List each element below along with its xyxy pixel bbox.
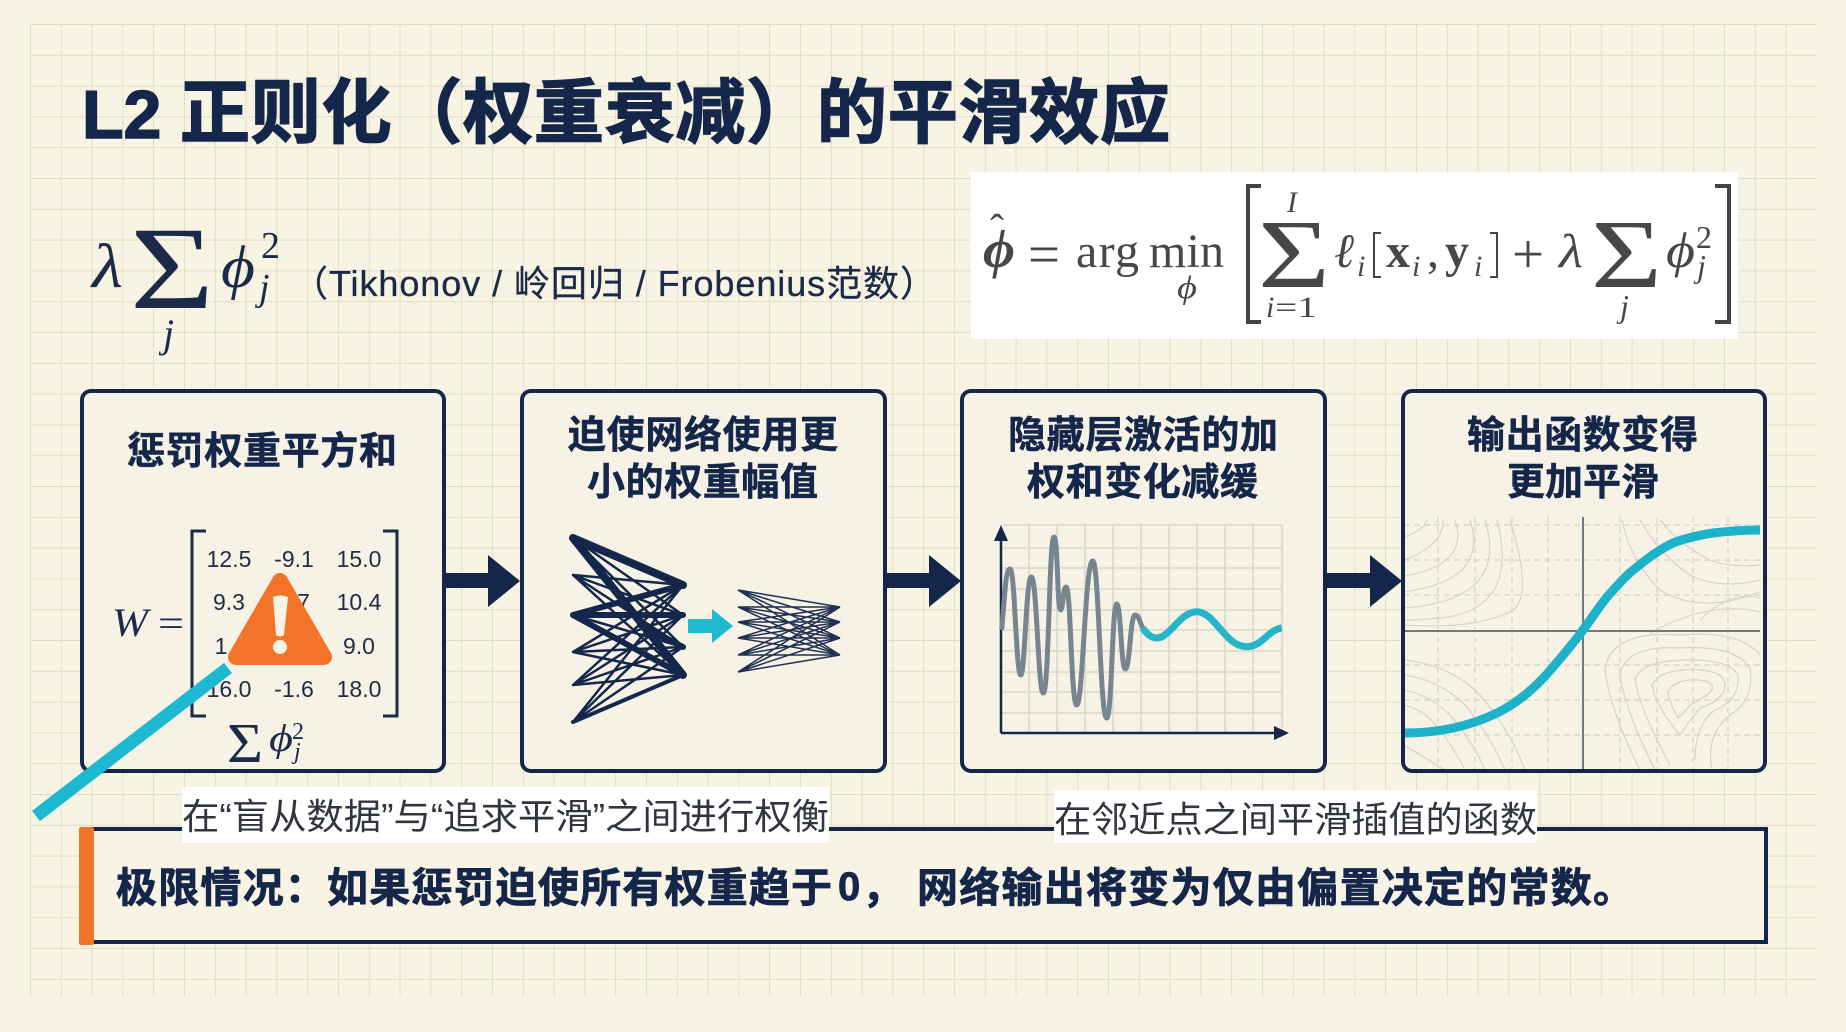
objective formula: Σ	[1258, 201, 1330, 309]
objective formula: ,	[1427, 225, 1439, 278]
weight matrix: 9.3	[213, 589, 245, 615]
callout text: 0	[838, 865, 860, 909]
weight matrix: 18.0	[337, 676, 381, 702]
panel 2 heading: 迫使网络使用更	[568, 415, 838, 457]
objective formula: i	[1412, 250, 1420, 283]
panel 4: smoother output	[1403, 391, 1765, 771]
objective formula: ϕ	[1666, 222, 1695, 278]
objective formula: x	[1386, 225, 1410, 278]
objective formula: j	[1616, 288, 1629, 324]
panel 3 heading: 权和变化减缓	[1027, 462, 1258, 504]
sum of squares formula: j	[291, 739, 301, 765]
weight matrix: =	[158, 603, 184, 645]
panel 3 heading: 隐藏层激活的加	[1008, 415, 1278, 457]
objective formula: 2	[1696, 219, 1712, 255]
formula: penalty term: λ	[90, 233, 123, 301]
connector: cyan line	[36, 668, 228, 816]
formula: penalty term	[90, 203, 280, 356]
arrow 1	[445, 555, 520, 607]
weight matrix: -1.6	[274, 676, 314, 702]
small-weight network	[738, 590, 840, 672]
smooth activation curve	[1143, 612, 1282, 647]
panel 2 heading	[568, 415, 838, 504]
callout text	[116, 865, 1634, 911]
weight matrix: 15.0	[337, 546, 381, 572]
objective formula: λ	[1557, 225, 1583, 278]
objective formula: i	[1357, 250, 1365, 283]
noisy activation curve	[1002, 537, 1143, 718]
icon: warning triangle	[236, 581, 324, 657]
callout accent bar	[79, 827, 94, 945]
panel 4 heading: 输出函数变得	[1467, 415, 1698, 457]
objective formula: ϕ	[1177, 269, 1197, 305]
callout: extreme case	[79, 827, 1766, 945]
weight matrix: 2.7	[278, 589, 310, 615]
label: trade-off: 在“盲从数据”与“追求平滑”之间进行权衡	[182, 796, 829, 837]
weight matrix: 1	[215, 633, 227, 659]
objective formula: ϕ	[983, 219, 1015, 279]
callout text: 网络输出将变为仅由偏置决定的常数。	[917, 865, 1634, 911]
objective formula: ˆ	[990, 207, 1004, 253]
title: L2	[82, 77, 161, 153]
large-weight network	[573, 538, 683, 722]
sum of squares formula: ϕ	[269, 718, 293, 760]
formula: penalty term: j	[254, 267, 270, 309]
weight matrix: 9.0	[343, 633, 375, 659]
weight matrix: 16.0	[207, 676, 251, 702]
formula: penalty term: 2	[261, 225, 280, 267]
objective formula: y	[1445, 225, 1469, 278]
objective formula: I	[1286, 186, 1299, 219]
formula: penalty term: j	[158, 311, 174, 356]
objective formula: =	[1028, 224, 1060, 286]
weight matrix	[112, 531, 397, 716]
objective formula: Σ	[1591, 201, 1662, 309]
objective formula: +	[1512, 224, 1544, 286]
title: 正则化（权重衰减）的平滑效应	[180, 74, 1170, 152]
activation chart	[994, 525, 1289, 740]
panel 4 heading	[1467, 415, 1698, 504]
objective formula: arg	[1076, 225, 1139, 278]
objective formula	[983, 186, 1729, 324]
weight matrix: W	[112, 600, 152, 645]
sum of squares formula	[227, 713, 304, 775]
objective formula: i	[1474, 250, 1482, 283]
objective formula: i	[1266, 291, 1274, 324]
objective formula: ℓ	[1334, 225, 1354, 278]
weight matrix: 10.4	[337, 589, 382, 615]
formula: penalty term: ϕ	[221, 234, 255, 300]
arrow 2	[885, 555, 961, 607]
panel 3 heading	[1008, 415, 1278, 504]
arrow 3	[1325, 555, 1402, 607]
callout text: 极限情况：如果惩罚迫使所有权重趋于	[116, 865, 832, 911]
panel 4 heading: 更加平滑	[1507, 462, 1659, 504]
chart axes	[994, 525, 1289, 740]
weight matrix: 3.3	[278, 633, 310, 659]
panel 1 heading: 惩罚权重平方和	[127, 431, 397, 473]
formula: penalty term: Σ	[130, 203, 214, 334]
objective formula: j	[1693, 248, 1706, 284]
objective formula: =1	[1275, 291, 1317, 324]
panel 2: smaller weight magnitudes	[522, 391, 885, 771]
smooth S-curve	[1405, 530, 1760, 733]
panel 2 heading: 小的权重幅值	[587, 462, 818, 504]
panel 3: activation slowdown	[962, 391, 1325, 771]
panel 4 border	[1403, 391, 1765, 771]
arrow: shrink	[688, 609, 733, 643]
axes	[1404, 517, 1760, 770]
formula caption: （Tikhonov / 岭回归 / Frobenius范数）	[292, 263, 936, 304]
objective formula box	[971, 172, 1738, 339]
output plot	[1404, 517, 1760, 770]
weight matrix: -9.1	[274, 546, 314, 572]
label: smooth interpolation: 在邻近点之间平滑插值的函数	[1054, 799, 1537, 840]
weight matrix: 12.5	[207, 546, 251, 572]
callout text: ，	[862, 865, 903, 911]
objective formula: min	[1149, 225, 1224, 278]
sum of squares formula: Σ	[227, 713, 263, 775]
panel 1: penalty on squared weights	[82, 391, 444, 775]
sum of squares formula: 2	[292, 719, 304, 745]
